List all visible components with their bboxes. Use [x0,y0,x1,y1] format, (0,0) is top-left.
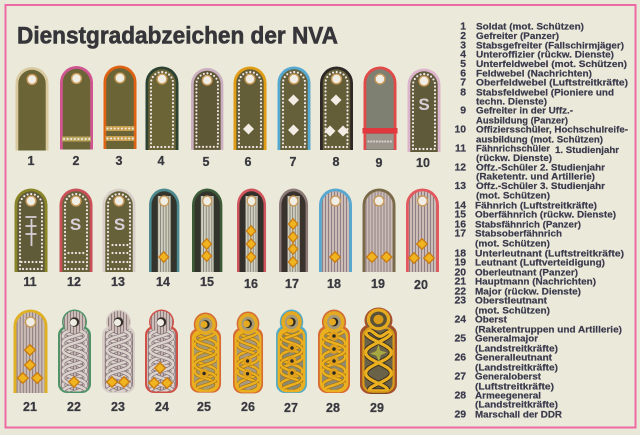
legend entry 8: Stabsfeldwebel (Pioniere und [476,88,614,98]
legend entry 6: 6 [460,68,466,80]
legend entry 19: Leutnant (Luftverteidigung) [475,258,605,268]
epaulette 16 [237,188,266,291]
epaulette 26 [233,303,263,414]
epaulette 1: 1 [28,154,35,168]
legend entry 1: 1 [460,22,466,32]
legend entry 17: (mot. Schützen) [475,238,550,250]
legend entry 26 [454,352,558,374]
legend entry 5: Unterfeldwebel (mot. Schützen) [476,59,627,70]
epaulette 13: 13 [111,275,125,289]
epaulette 27 [276,301,307,415]
legend entry 4: Unteroffizier (rückw. Dienste) [476,50,614,60]
epaulette 29 [360,308,397,415]
legend entry 12: (Raketentr. und Artillerie) [476,172,595,182]
epaulette 7 [278,66,310,169]
legend entry 23: Oberstleutnant [475,296,548,306]
legend entry 23: 23 [454,296,466,306]
epaulette 17 [279,188,308,291]
epaulette 24 [145,301,178,420]
legend entry 29: Marschall der DDR [475,410,562,420]
epaulette 25: 25 [197,400,211,414]
legend entry 28: (Landstreitkräfte) [475,400,558,410]
epaulette 11: 11 [23,275,37,289]
legend entry 2: 2 [460,31,466,42]
legend entry 2: Gefreiter (Panzer) [476,31,559,42]
legend entry 14: Fähnrich (Luftstreitkräfte) [475,200,597,212]
epaulette 15 [192,188,222,289]
legend entry 9: 9 [460,106,466,116]
legend entry 16: Stabsfähnrich (Panzer) [475,220,581,230]
row 2: cadets, ensigns and lieutenants [14,188,439,292]
legend entry 13: Offz.-Schüler 3. Studienjahr [476,181,605,192]
epaulette 24: 24 [155,400,169,414]
legend entry 1: Soldat (mot. Schützen) [476,22,584,32]
legend entry 26: 26 [454,352,466,364]
epaulette 20: 20 [414,278,428,292]
legend entry 12: 12 [454,162,466,174]
legend entry 9: Ausbildung (Panzer) [476,116,568,126]
epaulette 5 [191,68,223,169]
legend entry 28: 28 [454,390,466,402]
epaulette 8 [320,66,353,169]
epaulette 12: S [70,215,81,234]
legend entry 11 [455,144,619,164]
epaulette 7: 7 [290,155,297,169]
epaulette 28 [318,301,350,415]
legend entry 23 [454,296,550,316]
epaulette 5: 5 [203,155,210,169]
epaulette 2 [60,66,93,168]
legend entry 24: 24 [454,314,466,326]
legend entry 19: 19 [454,258,466,268]
legend entry 11: 11 [455,144,466,154]
epaulette 3: 3 [116,154,123,168]
legend entry 10 [454,124,628,146]
epaulette 16: 16 [244,277,258,291]
epaulette 23: 23 [111,400,125,414]
legend entry 28 [454,390,558,410]
legend entry 16: 16 [454,220,466,230]
epaulette 21: 21 [23,400,37,414]
legend entry 22: 22 [454,286,466,298]
legend entry 21: 21 [454,276,466,288]
legend entry 7: Oberfeldwebel (Luftstreitkräfte) [476,78,628,88]
legend entry 8: 8 [460,88,466,98]
epaulette 21 [14,310,47,414]
legend entry 25 [454,334,558,354]
epaulette 4 [146,66,178,168]
epaulette 11 [14,188,48,289]
legend entry 9 [460,106,573,126]
legend entry 10: 10 [454,124,466,136]
legend entry 17: Stabsoberfähnrich [475,228,562,240]
epaulette 25 [190,304,221,414]
legend: rank list [454,22,628,420]
epaulette 12 [60,188,92,289]
epaulette 14 [149,188,179,289]
epaulette 10 [408,68,440,170]
legend entry 13: 13 [454,181,466,192]
legend entry 17 [454,228,562,250]
epaulette 17: 17 [285,277,299,291]
epaulette 3 [104,66,136,168]
epaulette 13 [102,188,136,289]
legend entry 14: 14 [454,200,466,212]
epaulette 14: 14 [156,275,170,289]
epaulette 1 [16,67,48,168]
legend entry 20: 20 [454,268,466,278]
epaulette 26: 26 [241,400,255,414]
epaulette 6 [234,66,266,169]
legend entry 3: Stabsgefreiter (Fallschirmjäger) [476,40,624,52]
epaulette 10: S [418,95,430,114]
epaulette 23 [102,301,135,420]
legend entry 26: (Landstreitkräfte) [475,362,558,374]
legend entry 13 [454,181,605,202]
legend entry 23: (mot. Schützen) [475,306,550,316]
epaulette 10: 10 [416,156,430,170]
legend entry 18: 18 [454,248,466,260]
epaulette 28: 28 [326,401,340,415]
legend entry 5: 5 [460,59,466,70]
epaulette 13: S [114,215,125,234]
legend entry 15: Oberfähnrich (rückw. Dienste) [475,210,616,220]
epaulette 20 [406,188,439,292]
legend entry 17: 17 [454,228,466,240]
epaulette 12: 12 [67,275,81,289]
legend entry 12 [454,162,605,182]
legend entry 25: (Landstreitkräfte) [475,344,558,354]
legend entry 11: (rückw. Dienste) [476,153,552,164]
epaulette 9: 9 [376,156,383,170]
row 3: officers and generals [14,301,397,420]
epaulette 18 [319,188,352,291]
legend entry 28: Armeegeneral [475,390,541,402]
epaulette 27: 27 [284,401,298,415]
legend entry 10: Offiziersschüler, Hochschulreife- [476,124,628,136]
legend entry 27: 27 [454,372,466,382]
epaulette 2: 2 [73,154,80,168]
legend entry 21: Hauptmann (Nachrichten) [475,276,596,288]
epaulette 9 [362,66,398,170]
legend entry 24: (Raketentruppen und Artillerie) [475,324,622,336]
epaulette 4: 4 [158,154,165,168]
legend entry 11: 1. Studienjahr [555,145,619,156]
legend entry 20: Oberleutnant (Panzer) [475,268,578,278]
legend entry 6: Feldwebel (Nachrichten) [476,68,592,80]
legend entry 8: techn. Dienste) [476,96,547,108]
legend entry 27 [454,372,554,392]
legend entry 29: 29 [454,410,466,420]
legend entry 25: 25 [454,334,466,344]
epaulette 18: 18 [327,277,341,291]
legend entry 11: Fähnrichschüler [476,144,550,154]
legend entry 12: Offz.-Schüler 2. Studienjahr [476,162,605,174]
legend entry 9: Gefreiter in der Uffz.- [476,106,573,116]
legend entry 24 [454,314,622,336]
row 1: enlisted and NCO ranks [16,66,440,170]
title: Dienstgradabzeichen der NVA [17,22,338,49]
legend entry 25: Generalmajor [475,334,538,344]
legend entry 27: Generaloberst [475,372,542,382]
epaulette 8: 8 [333,155,340,169]
epaulette 22: 22 [67,400,81,414]
legend entry 22: Major (rückw. Dienste) [475,286,581,298]
epaulette 15: 15 [200,275,214,289]
legend entry 7: 7 [460,78,466,88]
legend entry 3: 3 [460,40,466,52]
legend entry 15: 15 [454,210,466,220]
legend entry 26: Generalleutnant [475,352,553,364]
legend entry 8 [460,88,614,108]
legend entry 10: ausbildung (mot. Schützen) [476,134,603,146]
epaulette 19 [362,188,396,291]
legend entry 13: (mot. Schützen) [476,190,550,202]
legend entry 27: (Luftstreitkräfte) [475,382,554,392]
legend entry 24: Oberst [475,314,508,326]
epaulette 19: 19 [371,277,385,291]
epaulette 6: 6 [245,155,252,169]
epaulette 22 [58,301,91,420]
legend entry 4: 4 [460,50,466,60]
legend entry 18: Unterleutnant (Luftstreitkräfte) [475,248,624,260]
epaulette 29: 29 [370,401,384,415]
